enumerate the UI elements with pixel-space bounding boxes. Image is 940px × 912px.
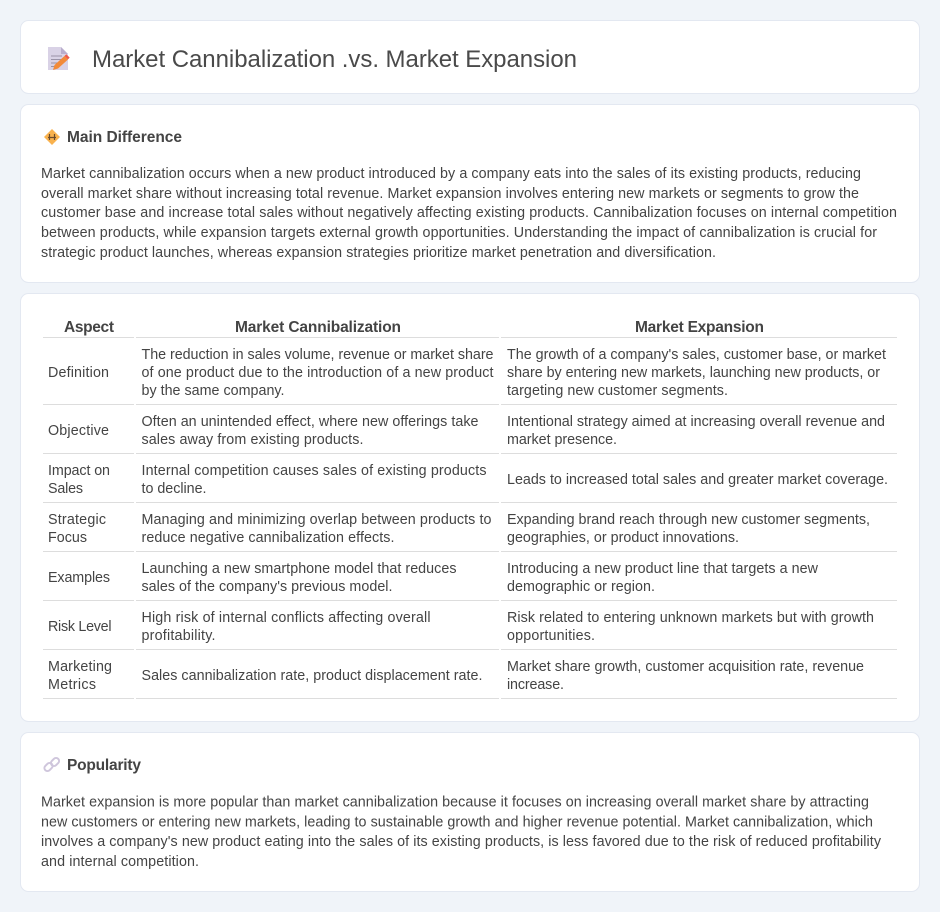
text block: popularity: Market expansion is more popular than market cannibalization because it focuses on increasing overall market share by attracting — [41, 794, 869, 810]
row: marketing metrics: increase. — [507, 677, 564, 693]
row: risk level: Risk related to entering unknown markets but with growth — [507, 610, 874, 626]
row: examples: demographic or region. — [507, 579, 655, 595]
row: strategic focus: reduce negative cannibalization effects. — [142, 530, 394, 546]
title text: Market Cannibalization .vs. Market Expansion — [92, 46, 577, 73]
row: risk level: profitability. — [142, 628, 216, 644]
row: impact on sales: to decline. — [142, 481, 206, 497]
row: objective — [48, 414, 885, 448]
row: objective: market presence. — [507, 432, 617, 448]
icon: document with pencil — [48, 47, 70, 70]
row: impact on sales: Internal competition causes sales of existing products — [142, 463, 486, 479]
row: strategic focus: geographies, or product innovations. — [507, 530, 739, 546]
panel: main difference — [20, 104, 920, 282]
row: marketing metrics: Market share growth, customer acquisition rate, revenue — [507, 659, 864, 675]
row: objective: Often an unintended effect, where new offerings take — [142, 414, 479, 430]
row: definition: The reduction in sales volume, revenue or market share — [142, 347, 494, 363]
table header: Market Cannibalization — [235, 319, 401, 336]
row: risk level — [48, 610, 874, 644]
row: strategic focus — [48, 512, 870, 546]
text block: popularity: new customers or entering new markets, leading to sustainable growth and higher revenue potential. Market cannibalization, which — [41, 814, 873, 830]
row: strategic focus: Expanding brand reach through new customer segments, — [507, 512, 870, 528]
table header: Market Expansion — [635, 319, 764, 336]
row: definition: targeting new customer segments. — [507, 383, 728, 399]
row: examples: Introducing a new product line that targets a new — [507, 561, 819, 577]
row: strategic focus: Focus — [48, 530, 87, 546]
row: marketing metrics — [48, 659, 864, 693]
row: strategic focus: Strategic — [48, 512, 106, 528]
text block: main difference — [41, 166, 897, 261]
text block: main difference: between products, while expansion targets external growth opportunities. Understanding the impact of cannibalization is crucial for — [41, 225, 877, 241]
row: risk level: Risk Level — [48, 619, 112, 635]
table header: Aspect — [64, 319, 114, 336]
text block: popularity: and internal competition. — [41, 854, 199, 870]
text block: main difference: overall market share without increasing total revenue. Market expansion involves entering new markets or segments to grow the — [41, 186, 859, 202]
row: impact on sales — [48, 463, 888, 497]
row: impact on sales: Impact on — [48, 463, 110, 479]
table header — [64, 319, 764, 336]
row: strategic focus: Managing and minimizing overlap between products to — [142, 512, 492, 528]
row: impact on sales: Sales — [48, 481, 83, 497]
row: objective: Intentional strategy aimed at increasing overall revenue and — [507, 414, 885, 430]
row: definition — [48, 347, 886, 399]
row: examples — [48, 561, 819, 595]
row: examples: Launching a new smartphone model that reduces — [142, 561, 456, 577]
heading: popularity: Popularity — [67, 757, 141, 774]
row: marketing metrics: Marketing — [48, 659, 112, 675]
row: examples: sales of the company's previous model. — [142, 579, 392, 595]
row: objective: Objective — [48, 423, 109, 439]
row: definition: The growth of a company's sales, customer base, or market — [507, 347, 886, 363]
text block: main difference: customer base and increase total sales without negatively affecting existing products. Cannibalization focuses on internal competition — [41, 205, 897, 221]
heading: main difference: Main Difference — [67, 129, 182, 146]
panel: comparison table — [20, 294, 920, 722]
row: definition: share by entering new markets, launching new products, or — [507, 365, 880, 381]
row: definition: by the same company. — [142, 383, 284, 399]
row: examples: Examples — [48, 570, 110, 586]
icon: chain link — [43, 757, 60, 772]
text block: main difference: strategic product launches, whereas expansion strategies prioritize market penetration and diversification. — [41, 245, 716, 261]
row: marketing metrics: Sales cannibalization rate, product displacement rate. — [142, 668, 482, 684]
text block: main difference: Market cannibalization occurs when a new product introduced by a company eats into the sales of its existing products, reducing — [41, 166, 861, 182]
row: definition: Definition — [48, 365, 109, 381]
text block: popularity: involves a company's new product eating into the sales of its existing products, is less favored due to the risk of reduced profitability — [41, 834, 882, 850]
row: impact on sales: Leads to increased total sales and greater market coverage. — [507, 472, 888, 488]
panel: popularity — [20, 732, 920, 892]
row: definition: of one product due to the introduction of a new product — [142, 365, 494, 381]
row: objective: sales away from existing products. — [142, 432, 364, 448]
panel: title — [20, 20, 920, 94]
text block: popularity — [41, 794, 882, 870]
row: marketing metrics: Metrics — [48, 677, 96, 693]
row: risk level: High risk of internal conflicts affecting overall — [142, 610, 430, 626]
icon: warning diamond — [44, 129, 60, 145]
row: risk level: opportunities. — [507, 628, 595, 644]
